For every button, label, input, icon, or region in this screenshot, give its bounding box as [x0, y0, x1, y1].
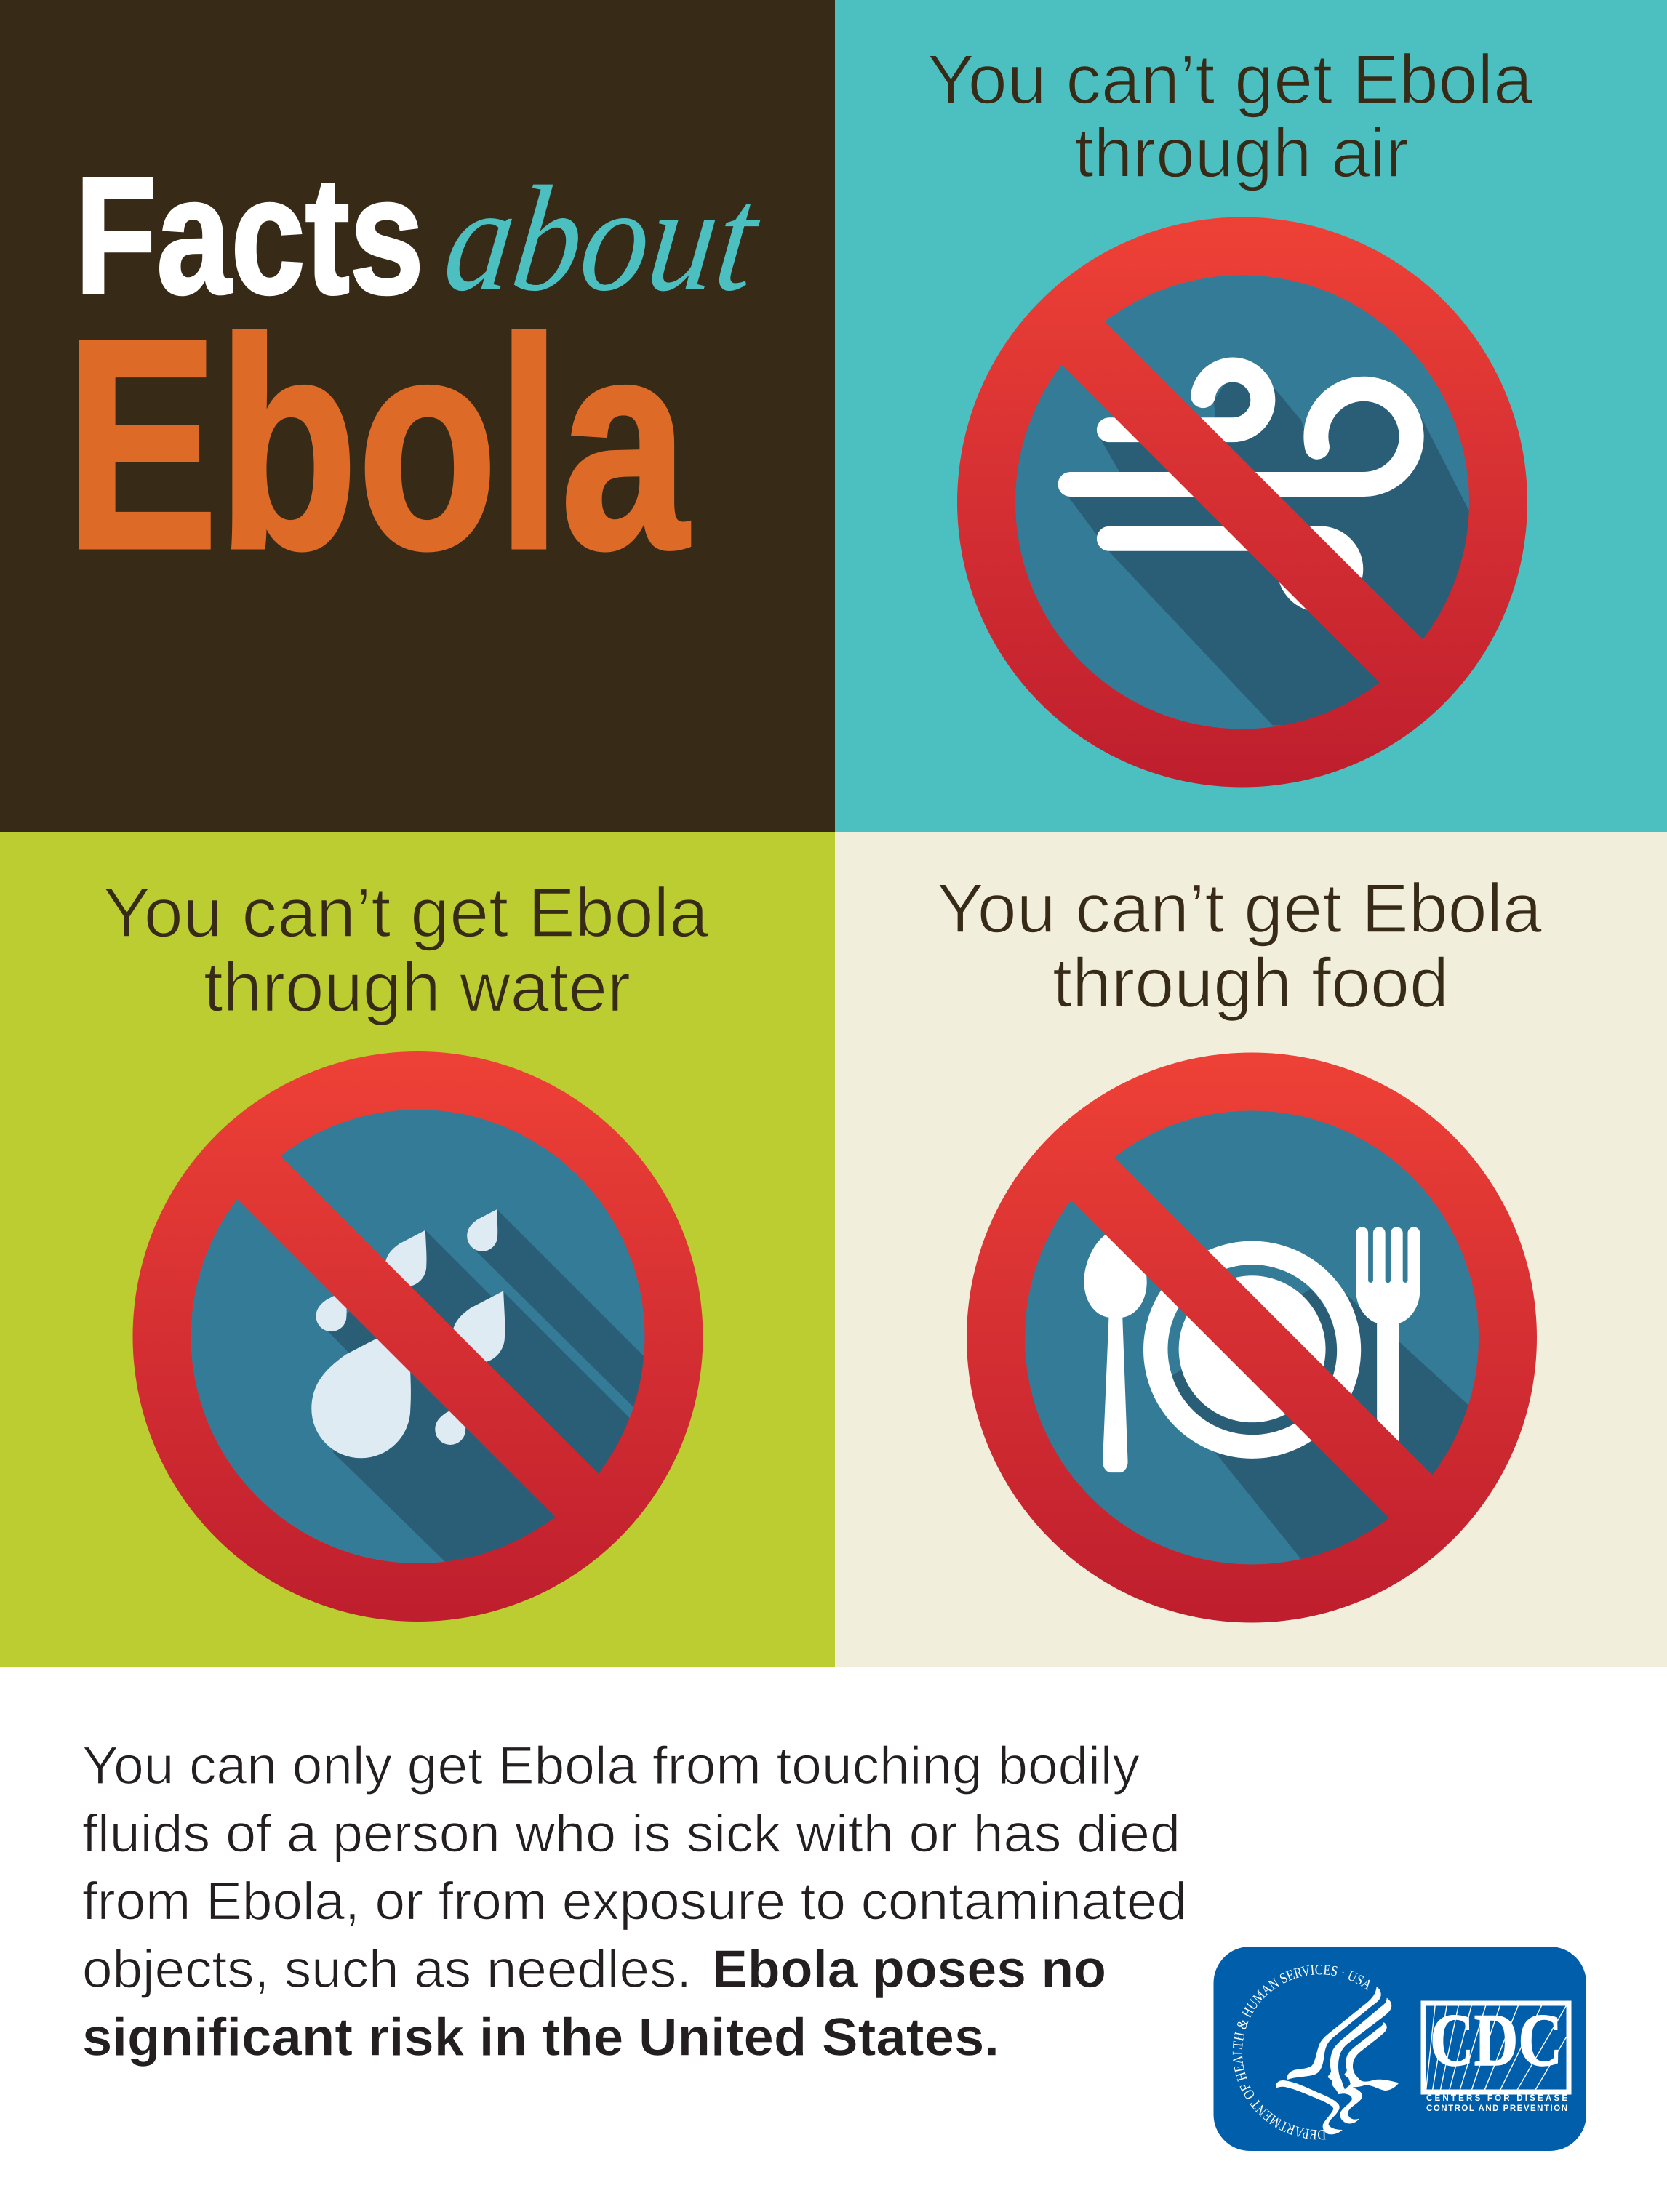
icon: prohibition sign [132, 1051, 703, 1622]
text block: how Ebola spreads: significant risk in the United States. [82, 2008, 999, 2067]
logo: CDC box [1423, 1999, 1569, 2113]
panel: air [835, 0, 1667, 832]
heading: through food [937, 870, 1543, 1022]
logo: HHS eagle [1276, 1987, 1399, 2134]
icon: plate and cutlery in blue disc [1024, 1110, 1523, 1565]
icon: water drops in blue disc [191, 1110, 644, 1563]
panel: water [0, 832, 835, 1667]
text block: how Ebola spreads: objects, such as needles. [82, 1940, 692, 1999]
heading: through air: You can’t get Ebola [927, 41, 1533, 119]
text block: how Ebola spreads: fluids of a person who is sick with or has died [82, 1805, 1180, 1863]
text block: how Ebola spreads: You can only get Ebola from touching bodily [82, 1736, 1140, 1795]
text block: how Ebola spreads: from Ebola, or from exposure to contaminated [82, 1872, 1187, 1931]
text block: how Ebola spreads [82, 1736, 1187, 2067]
icon: prohibition sign [957, 217, 1527, 787]
text block: how Ebola spreads: Ebola poses no [712, 1940, 1106, 1999]
heading: through food: You can’t get Ebola [937, 870, 1543, 947]
panel: title [0, 0, 835, 832]
logo: HHS and CDC [1213, 1947, 1586, 2151]
heading: about: about [436, 156, 769, 323]
heading: Ebola: Ebola [65, 278, 689, 611]
heading: Facts: Facts [75, 143, 424, 329]
heading: through air [927, 41, 1533, 192]
logo: CDC box: CDC [1430, 1999, 1562, 2082]
heading: through air: through air [1074, 114, 1409, 192]
logo: CDC box: CONTROL AND PREVENTION [1426, 2104, 1567, 2113]
panel: food [835, 832, 1667, 1667]
heading: through water [103, 874, 709, 1027]
heading: through water: You can’t get Ebola [103, 874, 709, 952]
heading: through food: through food [1052, 944, 1449, 1022]
icon: wind in blue disc [1015, 275, 1478, 730]
logo: CDC box: CENTERS FOR DISEASE [1426, 2094, 1567, 2103]
logo: HHS circular text: DEPARTMENT OF HEALTH & HUMAN SERVICES · USA [1232, 1965, 1370, 2139]
icon: prohibition sign [967, 1053, 1537, 1623]
heading: through water: through water [204, 948, 631, 1027]
